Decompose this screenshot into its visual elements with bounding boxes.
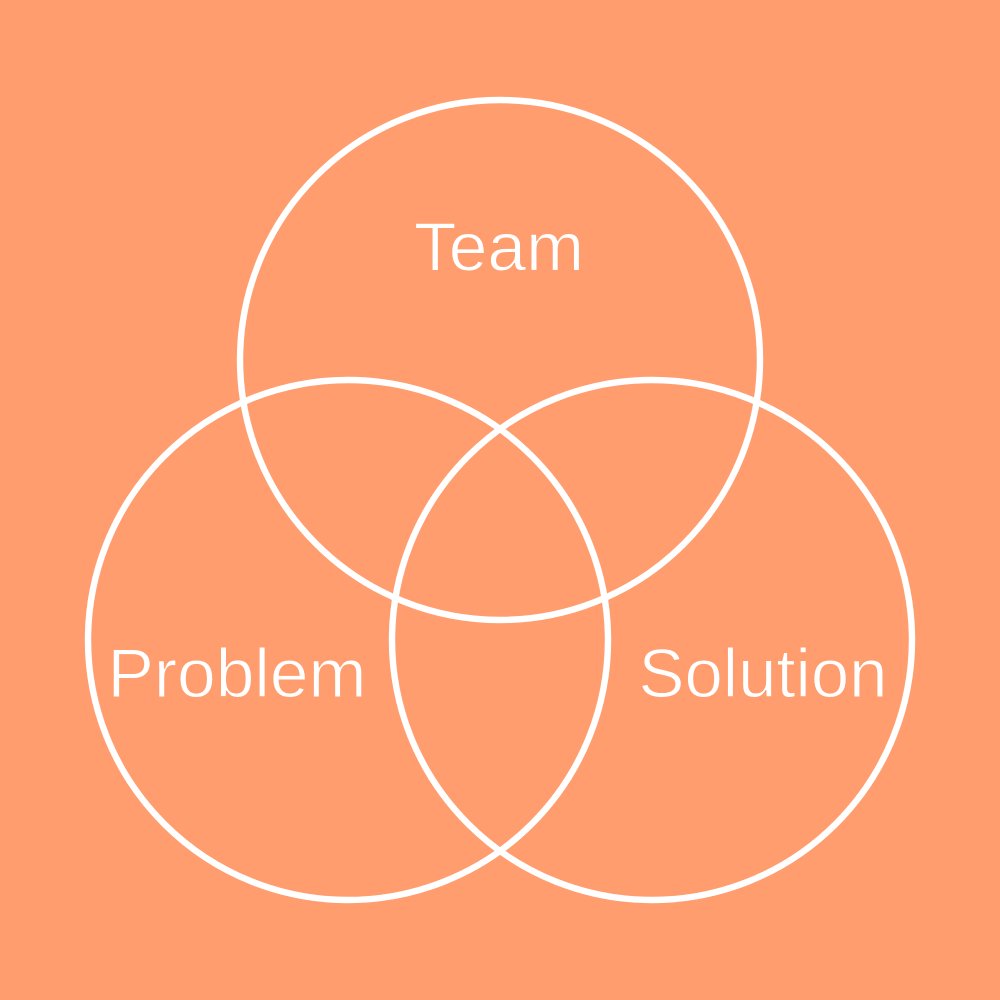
circle: Solution: [392, 380, 912, 900]
label: Problem: Problem: [108, 635, 366, 712]
circle: Problem: [88, 380, 608, 900]
label: Team: Team: [414, 208, 584, 286]
circle: Team: [240, 100, 760, 620]
label: Solution: Solution: [638, 635, 888, 712]
